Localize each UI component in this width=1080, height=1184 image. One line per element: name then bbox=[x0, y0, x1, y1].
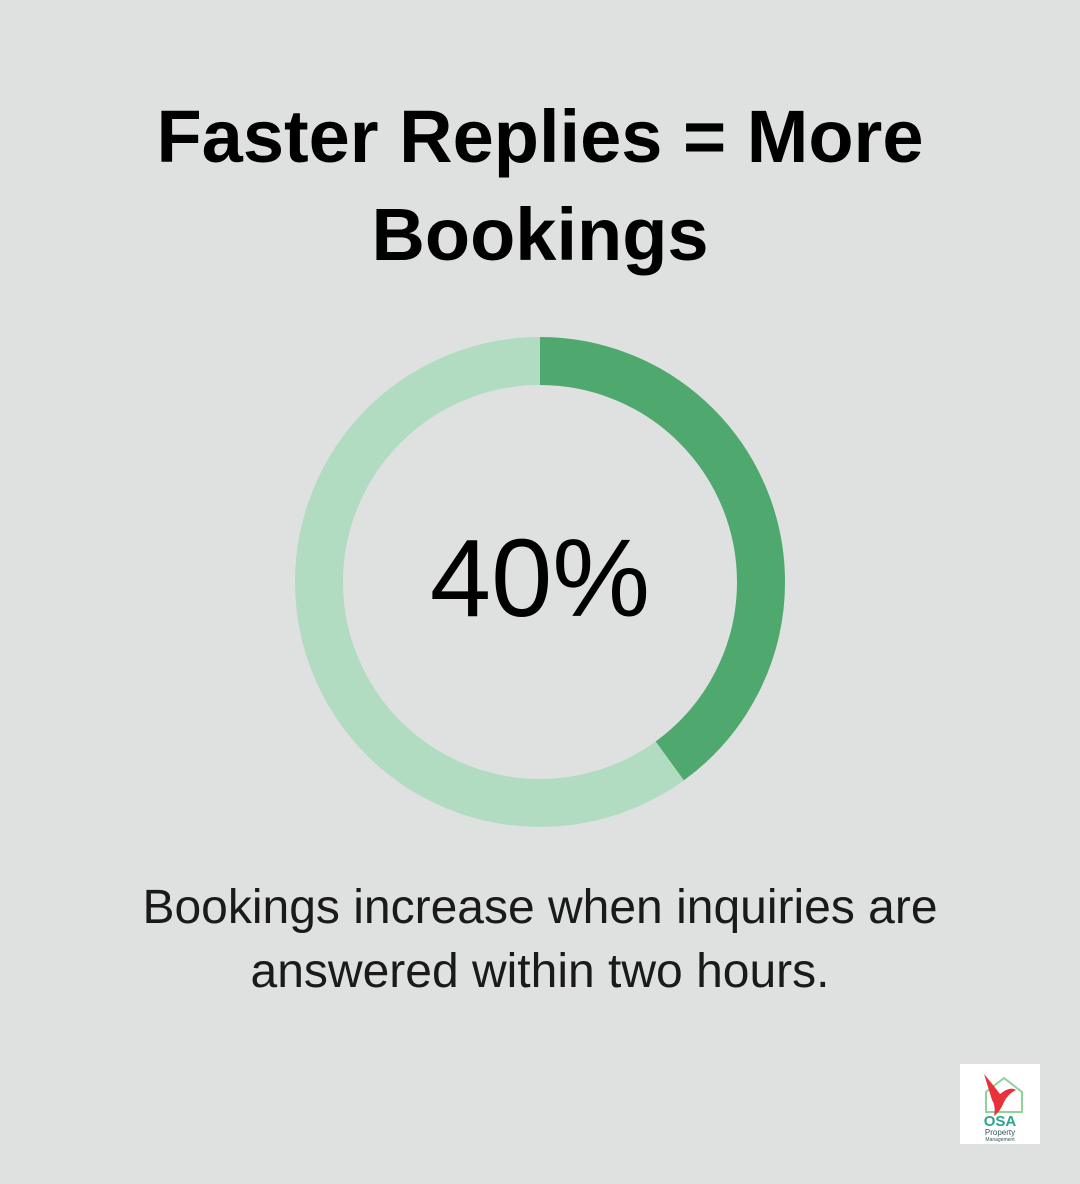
title bbox=[156, 95, 924, 276]
logo bbox=[960, 1064, 1040, 1144]
logo: OSA bbox=[984, 1113, 1016, 1130]
donut chart: 40% bbox=[430, 517, 650, 640]
title: Bookings bbox=[371, 193, 709, 276]
logo: Property bbox=[985, 1128, 1015, 1137]
description: Bookings increase when inquiries are bbox=[142, 881, 938, 934]
description: answered within two hours. bbox=[251, 945, 829, 998]
description bbox=[142, 881, 938, 998]
title: Faster Replies = More bbox=[156, 95, 924, 178]
logo: Management bbox=[985, 1137, 1015, 1143]
